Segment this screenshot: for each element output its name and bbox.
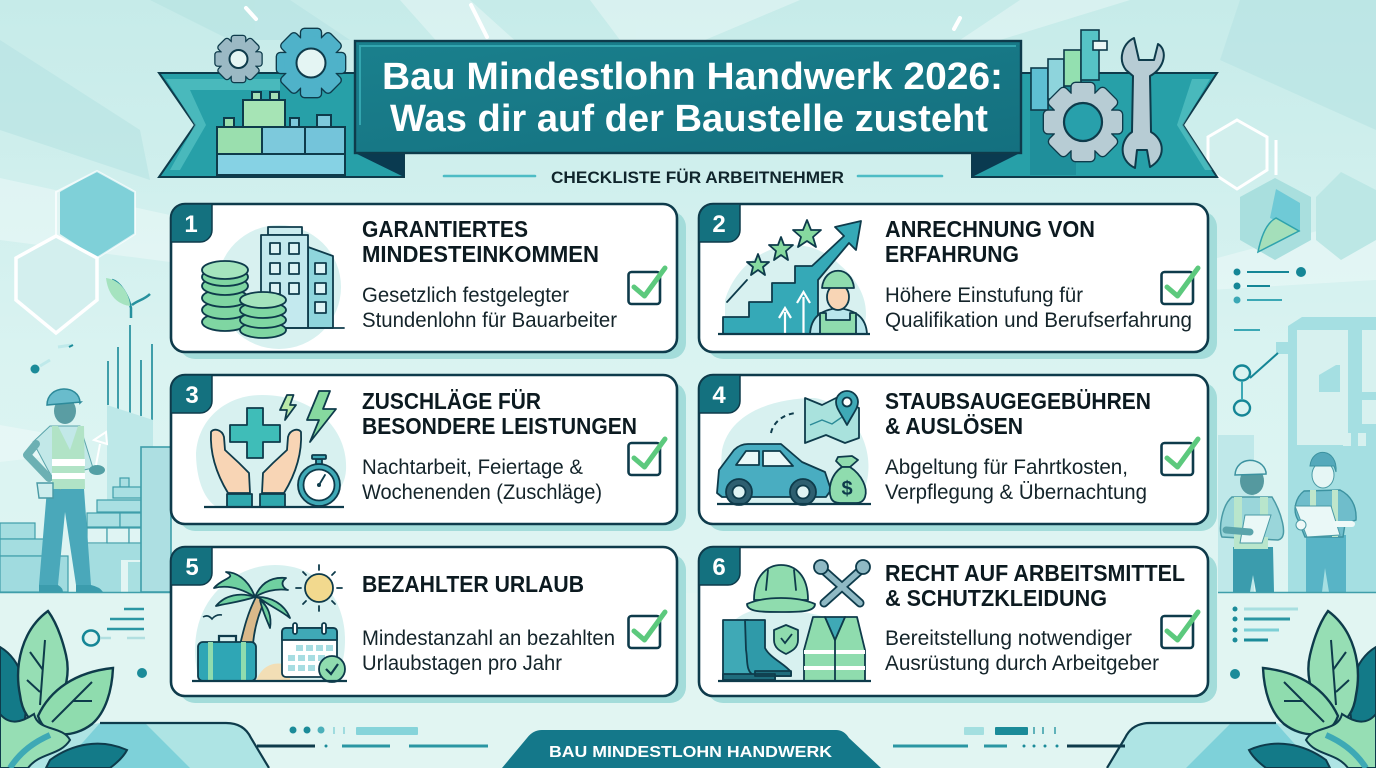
- footer tab: BAU MINDESTLOHN HANDWERK: [549, 744, 832, 761]
- text 2: ANRECHNUNG VON: [885, 216, 1095, 242]
- badge 2: [699, 204, 740, 242]
- icon: hands, cross, bolts and stopwatch: [196, 391, 346, 507]
- title: Bau Mindestlohn Handwerk 2026:: [382, 56, 1003, 98]
- text 6: Bereitstellung notwendiger: [885, 627, 1132, 650]
- text 4: [885, 388, 1151, 504]
- text 5: Urlaubstagen pro Jahr: [362, 652, 562, 675]
- subtitle: CHECKLISTE FÜR ARBEITNEHMER: [551, 168, 844, 187]
- badge 5: 5: [185, 554, 199, 581]
- icon: helmet, tools, boots, shield and vest: [718, 560, 871, 681]
- badge 3: 3: [185, 382, 199, 409]
- title banner: [355, 41, 1021, 153]
- icon: large grey gear: [1044, 83, 1122, 161]
- text 1: GARANTIERTES: [362, 216, 528, 242]
- right diagram marks: [1234, 267, 1306, 416]
- panel: card 6: [699, 547, 1217, 703]
- panel: card 1: [171, 204, 686, 359]
- left construction background: [0, 405, 171, 592]
- footer left panel: [0, 723, 269, 768]
- footer tab: [502, 730, 881, 768]
- text 6: [885, 560, 1185, 675]
- text 4: Verpflegung & Übernachtung: [885, 481, 1147, 504]
- footer right panel: [1107, 723, 1376, 768]
- panel: card 3: [171, 375, 686, 531]
- text 6: Ausrüstung durch Arbeitgeber: [885, 652, 1159, 675]
- ground line: [0, 592, 1376, 594]
- title: Was dir auf der Baustelle zusteht: [390, 98, 988, 140]
- text 2: [885, 216, 1192, 332]
- text 2: Höhere Einstufung für: [885, 284, 1083, 307]
- text 3: BESONDERE LEISTUNGEN: [362, 413, 637, 439]
- lower right marks: [1230, 606, 1298, 679]
- left hexagons: [16, 171, 135, 333]
- text 3: Wochenenden (Zuschläge): [362, 481, 602, 504]
- text 1: MINDESTEINKOMMEN: [362, 241, 599, 267]
- icon: car, map and money bag: $: [841, 478, 853, 500]
- panel: card 4: [699, 375, 1217, 531]
- text 3: ZUSCHLÄGE FÜR: [362, 388, 541, 414]
- icon: bar chart: [1031, 30, 1107, 110]
- checkbox 3: [628, 439, 665, 475]
- text 1: Stundenlohn für Bauarbeiter: [362, 309, 617, 332]
- right construction background: [1218, 317, 1376, 592]
- text 4: Abgeltung für Fahrtkosten,: [885, 456, 1128, 479]
- badge 1: 1: [184, 211, 198, 238]
- icon: car, map and money bag: [717, 391, 871, 505]
- badge 5: [171, 547, 212, 585]
- badge 6: [699, 547, 740, 585]
- badge 3: [171, 375, 212, 413]
- icon: building blocks: [217, 92, 345, 175]
- text 6: RECHT AUF ARBEITSMITTEL: [885, 560, 1185, 586]
- icon: small gear: [216, 36, 262, 82]
- text 3: [362, 388, 637, 504]
- panel: card 2: [699, 204, 1217, 359]
- left worker: [27, 389, 107, 592]
- text 2: ERFAHRUNG: [885, 241, 1019, 267]
- text 1: Gesetzlich festgelegter: [362, 284, 569, 307]
- ribbon tail right: [972, 73, 1217, 177]
- icon: wrench: [1122, 38, 1164, 168]
- checkbox 5: [628, 612, 665, 648]
- right workers: [1220, 452, 1356, 592]
- icon: coins and building: [202, 225, 344, 349]
- ribbon tail left: [159, 73, 404, 177]
- icon: right leaves: [1249, 611, 1376, 768]
- footer right decoration: [893, 727, 1125, 748]
- text 2: Qualifikation und Berufserfahrung: [885, 309, 1192, 332]
- checkbox 4: [1162, 439, 1198, 475]
- text 4: & AUSLÖSEN: [885, 413, 1023, 439]
- checkbox 6: [1162, 612, 1198, 648]
- checkbox 2: [1162, 268, 1198, 304]
- worker with clipboard: [1220, 460, 1284, 592]
- lower left marks: [83, 609, 147, 678]
- footer left decoration: [257, 726, 488, 748]
- badge 4: 4: [712, 382, 726, 409]
- text 5: BEZAHLTER URLAUB: [362, 571, 584, 597]
- text 5: [362, 571, 615, 675]
- title: [382, 56, 1003, 140]
- panel: card 5: [171, 547, 686, 703]
- badge 6: 6: [712, 554, 726, 581]
- icon: career stairs with worker: [718, 220, 870, 334]
- icon: left leaves: [0, 611, 127, 768]
- right hexagons: [1208, 120, 1376, 260]
- text 3: Nachtarbeit, Feiertage &: [362, 456, 583, 479]
- icon: large gear: [277, 29, 345, 97]
- text 1: [362, 216, 617, 332]
- left sprout and poles: [30, 278, 152, 420]
- badge 1: [171, 204, 212, 242]
- icon: palm, suitcase, sun and calendar: [192, 565, 347, 682]
- worker with plan: [1295, 452, 1356, 592]
- checkbox 1: [628, 268, 665, 304]
- text 4: STAUBSAUGEGEBÜHREN: [885, 388, 1151, 414]
- badge 2: 2: [712, 211, 726, 238]
- text 6: & SCHUTZKLEIDUNG: [885, 585, 1107, 611]
- badge 4: [699, 375, 740, 413]
- text 5: Mindestanzahl an bezahlten: [362, 627, 615, 650]
